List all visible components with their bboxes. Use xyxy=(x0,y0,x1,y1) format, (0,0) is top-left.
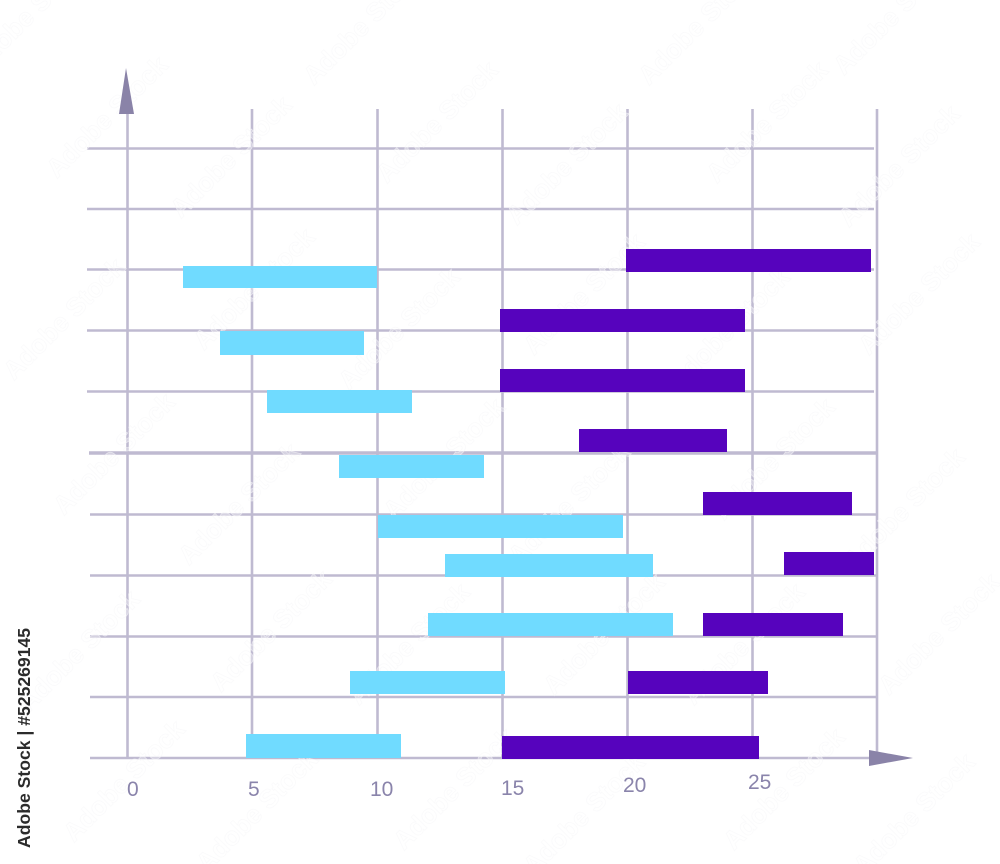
background watermark pattern: Adobe Stock xyxy=(204,563,338,697)
background watermark pattern: Adobe Stock xyxy=(700,54,834,188)
background watermark pattern: Adobe Stock xyxy=(370,54,504,188)
background watermark pattern: Adobe Stock xyxy=(172,436,306,570)
background watermark pattern: Adobe Stock xyxy=(832,98,966,232)
x axis labels: 5 xyxy=(248,778,260,801)
background watermark pattern: Adobe Stock xyxy=(500,96,634,230)
background watermark pattern: Adobe Stock xyxy=(47,386,181,520)
background watermark pattern: Adobe Stock xyxy=(852,226,986,360)
background watermark pattern: Adobe Stock xyxy=(57,713,191,847)
cyan task bars xyxy=(183,266,673,758)
background watermark pattern: Adobe Stock xyxy=(717,721,851,855)
background watermark pattern: Adobe Stock xyxy=(502,436,636,570)
background watermark pattern: Adobe Stock xyxy=(40,49,174,183)
y axis arrow xyxy=(119,68,134,114)
x axis labels: 15 xyxy=(501,777,524,800)
background watermark pattern: Adobe Stock xyxy=(517,226,651,360)
x axis arrow xyxy=(869,750,913,766)
background watermark pattern: Adobe Stock xyxy=(677,576,811,710)
watermark stock id: Adobe Stock | #525269145 xyxy=(14,628,34,848)
purple task bars xyxy=(500,249,874,759)
background watermark pattern: Adobe Stock xyxy=(12,583,146,717)
x axis labels: 20 xyxy=(623,774,646,797)
x axis labels xyxy=(127,771,771,801)
background watermark pattern: Adobe Stock xyxy=(342,576,476,710)
background watermark pattern: Adobe Stock xyxy=(707,391,841,525)
background watermark pattern: Adobe Stock xyxy=(537,566,671,700)
background watermark pattern: Adobe Stock xyxy=(187,221,321,355)
background watermark pattern: Adobe Stock xyxy=(164,89,298,223)
background watermark pattern: Adobe Stock xyxy=(0,251,131,385)
x axis labels: 0 xyxy=(127,778,139,801)
background watermark pattern: Adobe Stock xyxy=(662,261,796,395)
x axis labels: 10 xyxy=(370,778,393,801)
background watermark pattern: Adobe Stock xyxy=(377,391,511,525)
background watermark pattern: Adobe Stock xyxy=(837,441,971,575)
background watermark pattern: Adobe Stock xyxy=(387,721,521,855)
background watermark pattern: Adobe Stock xyxy=(332,261,466,395)
x axis labels: 25 xyxy=(748,771,771,794)
